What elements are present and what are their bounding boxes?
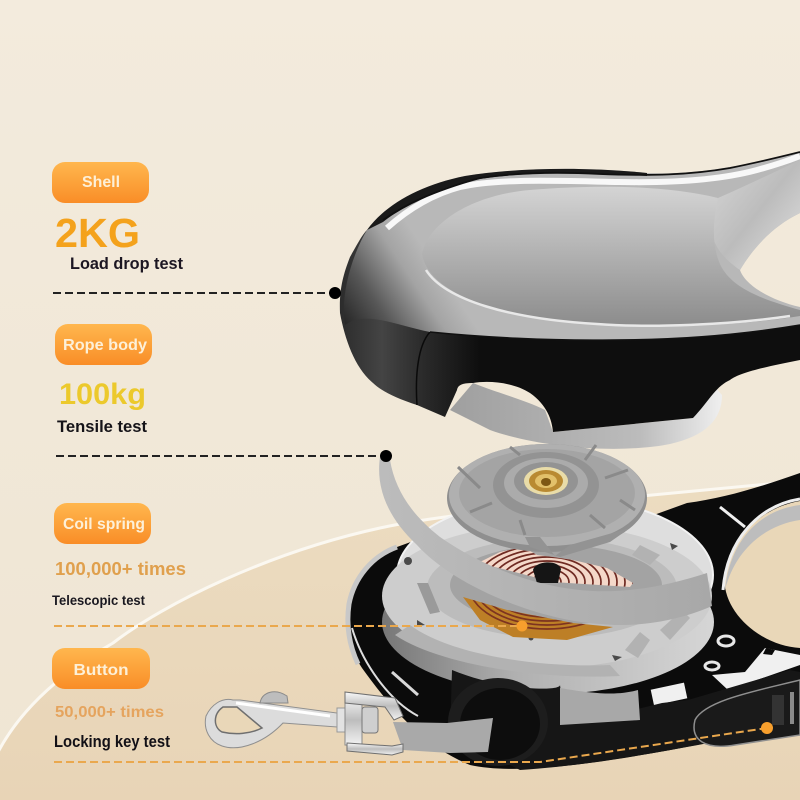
label: button: Button (74, 662, 128, 679)
front strap ribbon (379, 457, 712, 625)
lower tan curved background (0, 480, 800, 800)
housing ribs (395, 545, 690, 677)
spring housing (382, 497, 714, 694)
leader line: coil spring (54, 620, 528, 632)
top gear disk (447, 444, 647, 557)
label: rope body: Rope body (63, 337, 147, 354)
label: shell: 2KG (55, 210, 140, 256)
label: rope body (55, 324, 152, 436)
label: coil spring: Coil spring (63, 516, 145, 533)
leash strap end (393, 718, 493, 753)
label: shell: Shell (82, 174, 120, 191)
rear leash body with handle (348, 473, 800, 769)
label: button (52, 648, 170, 751)
shell front panel seam (416, 332, 430, 405)
handle markings (651, 507, 800, 705)
label: rope body: Tensile test (57, 418, 148, 436)
recessed oval (422, 187, 800, 326)
handle upper band (713, 160, 800, 270)
label: button: Locking key test (54, 733, 170, 751)
coil spring (463, 549, 633, 640)
rear strap loop (450, 383, 722, 449)
label: shell: Load drop test (70, 255, 183, 273)
label: shell (52, 162, 183, 273)
handle hole (723, 499, 800, 648)
top glossy rim (387, 156, 800, 228)
label: rope body: 100kg (59, 378, 146, 411)
label: button: 50,000+ times (55, 704, 164, 721)
label: coil spring: 100,000+ times (55, 559, 186, 579)
leader line: shell (53, 287, 341, 299)
housing slots (404, 543, 692, 668)
brass bearing (524, 467, 568, 495)
label: coil spring: Telescopic test (52, 592, 145, 608)
top shell (340, 152, 800, 432)
leader line: button (54, 722, 773, 762)
metal snap clasp (205, 692, 403, 755)
spring post (533, 562, 561, 583)
shell black side (340, 230, 800, 432)
label: coil spring (52, 503, 186, 608)
front body block and knobs (448, 670, 800, 770)
dark top edge of shell (367, 169, 647, 230)
shell silver face (344, 152, 800, 340)
leader line: rope body (56, 450, 392, 462)
right button (694, 680, 800, 746)
